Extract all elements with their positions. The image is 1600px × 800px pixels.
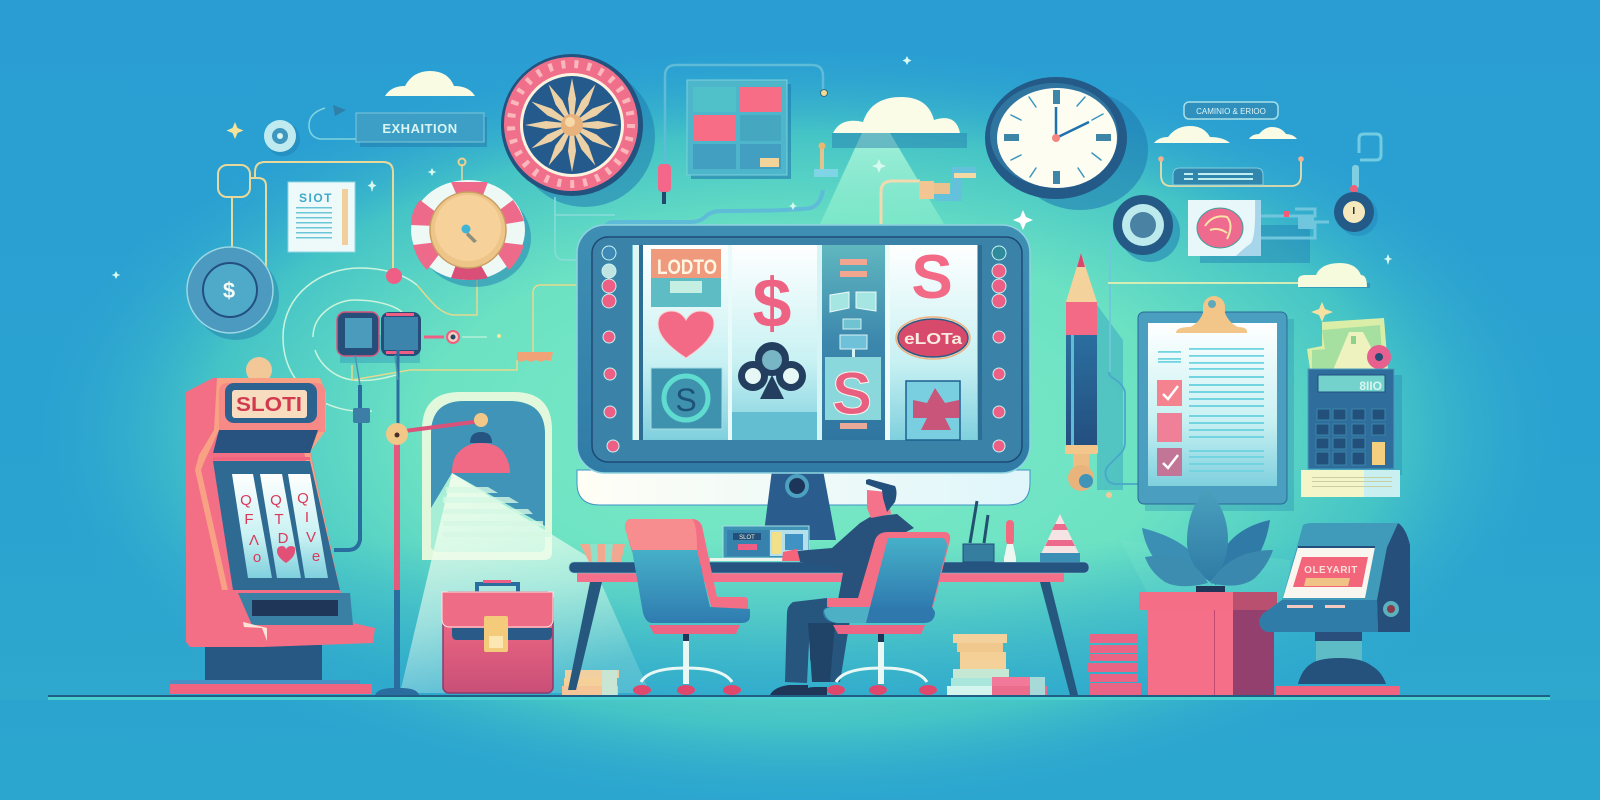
left chair pink shell — [625, 519, 748, 610]
reel strip symbols: o — [253, 549, 261, 566]
calculator with banknotes — [1301, 318, 1402, 497]
clock — [985, 77, 1148, 210]
screen background — [632, 245, 978, 440]
sparkle gold — [1311, 302, 1333, 322]
cloud shadow — [832, 133, 967, 148]
left coin with pendulum — [187, 162, 393, 340]
text lines — [1158, 348, 1264, 472]
cloud lower right — [1298, 263, 1370, 288]
desk — [568, 562, 1089, 695]
reel 3 — [817, 245, 885, 440]
reel 1: S — [675, 382, 697, 418]
icon: round knob — [1113, 195, 1180, 262]
pink pedestal — [1139, 592, 1277, 695]
reel strip symbols: Λ — [249, 532, 259, 549]
calculator keys — [1316, 409, 1385, 465]
document: slot — [288, 182, 355, 252]
panel: paper with badge and bracket — [1188, 200, 1329, 263]
laptop: SLOT — [739, 535, 755, 541]
laptop — [710, 526, 818, 561]
icon: target disc — [264, 120, 300, 156]
icon: sparkle left — [226, 122, 244, 139]
left indicator lights — [602, 246, 619, 452]
connector bar from monitor — [517, 352, 553, 362]
document: slot: SIOT — [299, 191, 333, 205]
window frame — [422, 392, 552, 560]
cloud top centre — [833, 97, 960, 133]
connector: blue cable from panel to plug — [555, 65, 823, 260]
top knob — [246, 357, 272, 383]
reel strip symbols: D — [278, 530, 289, 547]
cabinet orange stripe — [195, 378, 340, 590]
reel window — [213, 461, 340, 590]
poker chip — [411, 158, 531, 287]
chips pink small — [992, 677, 1047, 695]
checkbox 2 — [1157, 413, 1182, 442]
left coin with pendulum: $ — [223, 278, 235, 303]
kiosk screen — [1283, 547, 1375, 598]
reel 3: S — [832, 360, 872, 427]
pencil — [1065, 253, 1098, 491]
marquee: SLOTI — [236, 394, 302, 416]
reel 1 — [633, 245, 730, 440]
icon: small post — [814, 142, 838, 177]
heart — [277, 546, 295, 563]
left chair back and seat — [632, 550, 750, 623]
kiosk terminal — [1260, 523, 1410, 695]
label bubble — [1184, 102, 1278, 119]
reel strip symbols: F — [244, 511, 254, 528]
reel 4: S — [911, 243, 953, 312]
monitor chin — [577, 470, 1030, 505]
cup of pens on desk — [580, 544, 625, 562]
notes button — [1367, 345, 1391, 369]
monitor stand — [763, 470, 836, 540]
connector line to right cloud — [1110, 237, 1148, 372]
icon: small gauge with hook — [1334, 134, 1381, 236]
light cone under cloud — [820, 133, 944, 224]
monitor — [577, 225, 1030, 540]
party cone — [1040, 514, 1080, 562]
banknotes — [1307, 318, 1388, 372]
chips left — [562, 670, 619, 695]
kiosk terminal: OLEYARIT — [1304, 565, 1358, 576]
reel strip symbols — [240, 490, 320, 566]
person — [770, 479, 914, 695]
reel strip symbols: T — [274, 511, 284, 528]
occupant chair shell — [827, 532, 950, 607]
occupant chair base — [833, 625, 925, 634]
shoes — [770, 685, 827, 695]
connector line horizontal — [1108, 282, 1300, 284]
exhibition label with arrow: EXHAITION — [382, 121, 458, 136]
slot machine plinth — [170, 645, 372, 694]
wire to plant — [1105, 372, 1157, 484]
neck — [213, 430, 318, 453]
exhibition label with arrow — [309, 105, 487, 147]
lamp light cone — [400, 473, 650, 693]
occupant chair back — [870, 538, 947, 607]
pink node — [386, 268, 402, 284]
twin block device — [337, 312, 501, 363]
reel strip symbols: Q — [240, 492, 252, 509]
cloud top left — [385, 71, 475, 96]
reel strips — [232, 474, 328, 578]
briefcase — [442, 580, 553, 693]
chips centre — [947, 634, 1009, 695]
kiosk dark side — [1330, 523, 1410, 632]
window lines in light — [443, 487, 551, 537]
clipboard — [1138, 296, 1294, 511]
hair — [866, 479, 896, 512]
reel strip symbols: Q — [270, 492, 282, 509]
pen holder — [963, 501, 994, 562]
reel 2 — [728, 245, 817, 440]
ground line — [48, 695, 1550, 700]
left chair top panel — [625, 519, 697, 550]
reel strip symbols: Q — [297, 490, 309, 507]
marquee — [219, 383, 325, 432]
reel 1: LODTO — [657, 256, 717, 279]
kiosk lower band — [1260, 600, 1378, 632]
connector plug — [881, 167, 976, 224]
trouser shadow leg — [808, 623, 835, 682]
clipboard clip — [1176, 296, 1247, 333]
face — [867, 490, 891, 518]
right indicator lights — [992, 246, 1006, 452]
floor lamp — [375, 413, 510, 695]
reel strip symbols: e — [312, 548, 320, 565]
checkbox 1 — [1157, 380, 1182, 406]
reel 4: eLOTa — [904, 331, 962, 348]
slot machine — [170, 357, 375, 694]
roulette wheel — [501, 54, 655, 207]
chair: empty left — [625, 519, 750, 695]
bracket with list panel — [1158, 156, 1304, 186]
reel strip symbols: V — [306, 529, 316, 546]
equals key — [1372, 442, 1385, 465]
occupant chair seat — [823, 607, 935, 623]
calculator with banknotes: 8IIO — [1359, 379, 1382, 393]
kiosk body — [1260, 523, 1398, 632]
clouds top right — [1154, 126, 1297, 143]
jacket — [796, 514, 914, 600]
chair: occupant chair — [823, 532, 950, 695]
panel: four-tile dashboard — [687, 80, 791, 179]
kiosk dome and foot — [1276, 658, 1400, 695]
monitor bezel — [577, 225, 1030, 473]
reel 2: $ — [753, 264, 791, 342]
connector: gold wire — [352, 280, 577, 380]
trousers — [785, 598, 850, 683]
small dot — [1106, 492, 1112, 498]
icon: pink plug — [658, 164, 671, 204]
monitor stand port — [785, 474, 809, 498]
checkbox 3 — [1157, 448, 1182, 476]
left chair base — [649, 625, 740, 634]
hand — [782, 549, 800, 561]
coin tray — [238, 593, 353, 625]
floor lamp cables — [353, 350, 398, 435]
receipt — [1301, 470, 1400, 497]
kiosk neck — [1315, 632, 1362, 664]
sparkles — [112, 56, 1392, 279]
cabinet — [186, 378, 375, 647]
plant — [1142, 488, 1273, 592]
chips pink stack right — [1088, 634, 1141, 695]
reel strip symbols: I — [305, 509, 309, 526]
connecting cable — [334, 385, 360, 550]
label bubble: CAMINIO & ERIOO — [1196, 107, 1266, 116]
desk lipstick — [1004, 520, 1016, 562]
ledge highlight — [243, 622, 267, 641]
icon: ring end — [820, 90, 828, 96]
connector: wire rings — [283, 268, 417, 411]
reel 4 — [885, 243, 977, 440]
